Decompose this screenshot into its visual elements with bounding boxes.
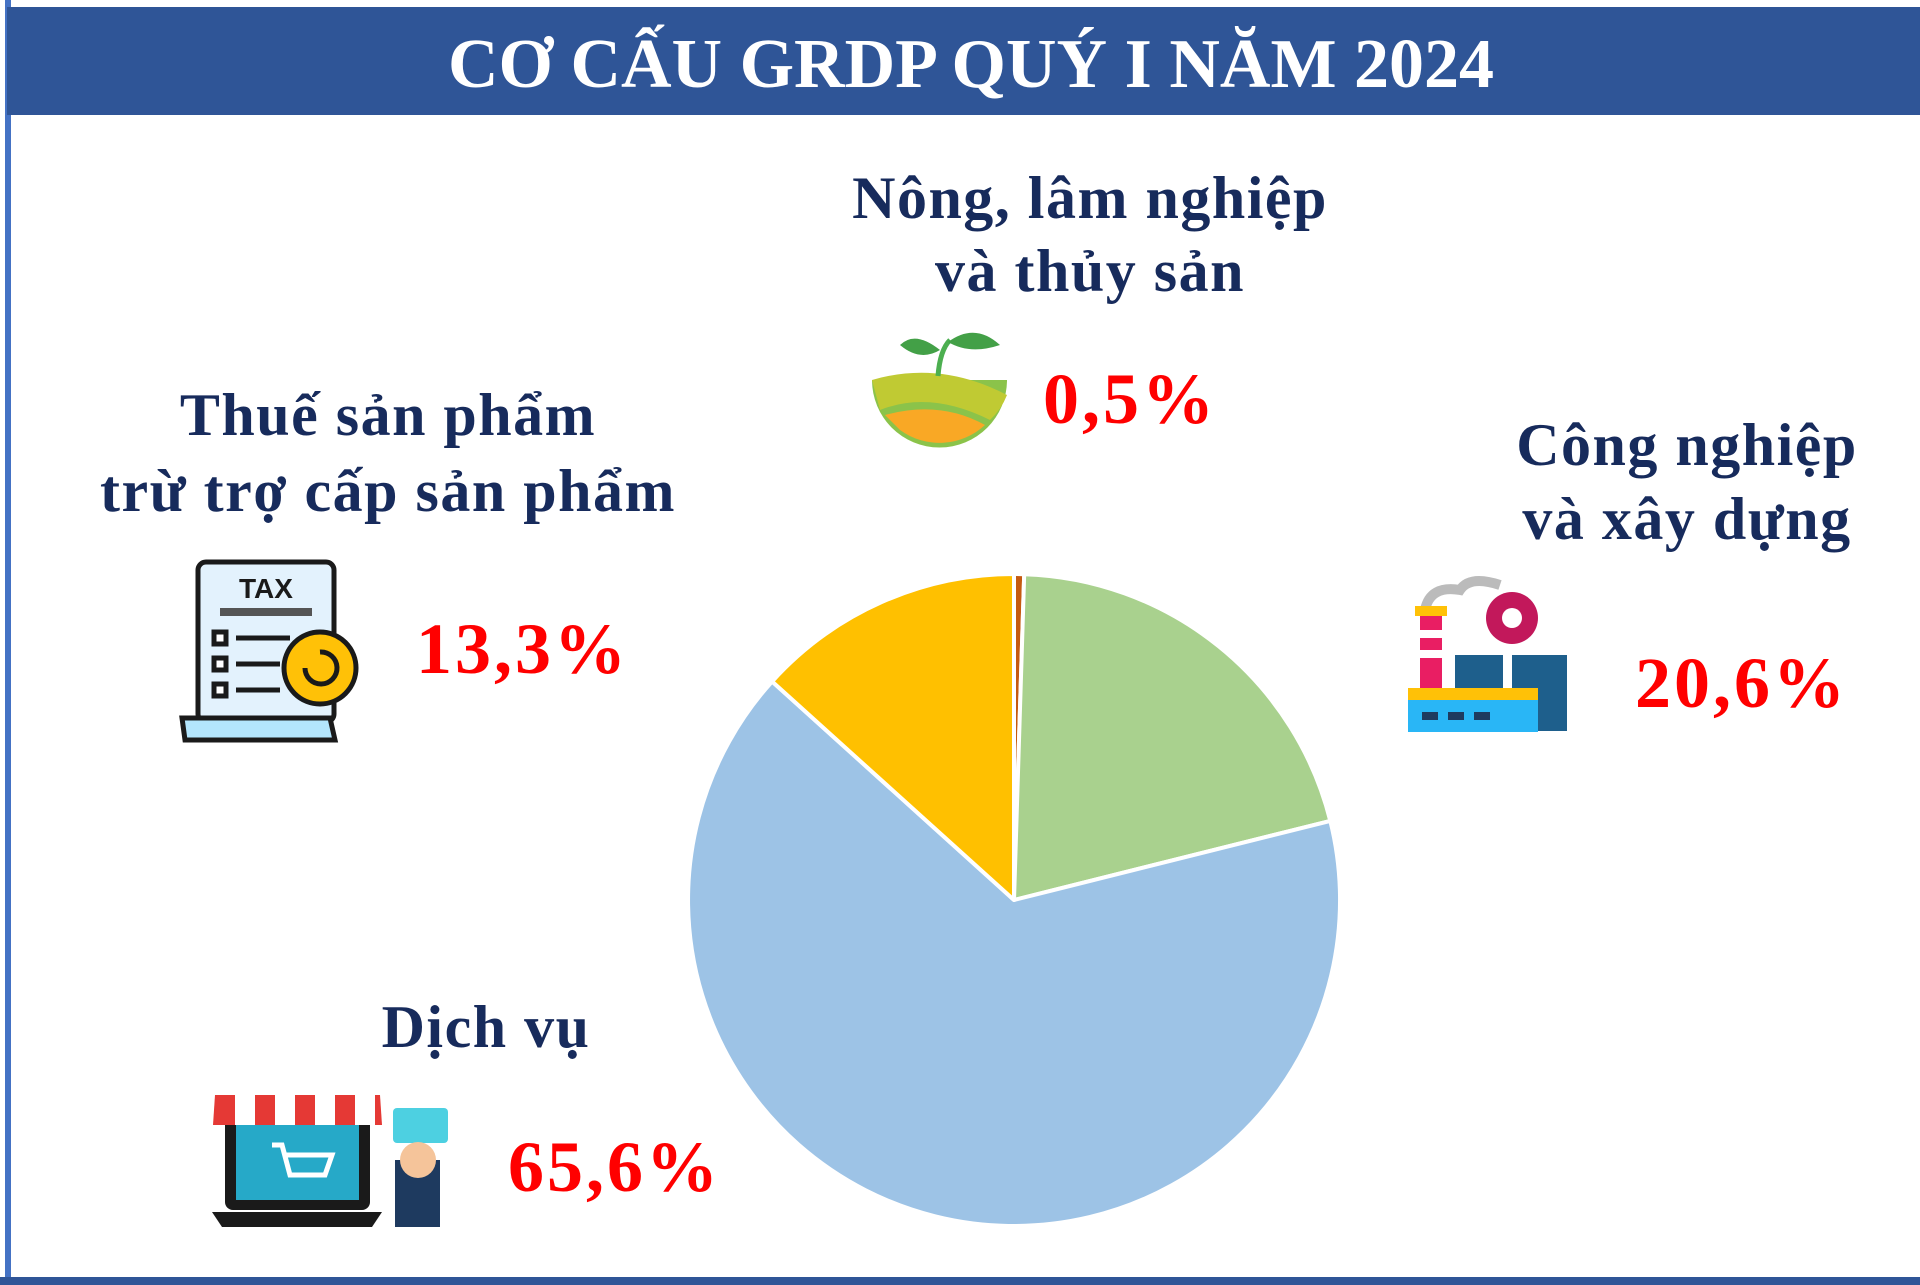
label: agriculture: và thủy sản xyxy=(935,238,1245,304)
icon: shop xyxy=(212,1095,448,1227)
label: agriculture xyxy=(852,165,1328,304)
label: industry: và xây dựng xyxy=(1522,486,1852,552)
title: CƠ CẤU GRDP QUÝ I NĂM 2024 xyxy=(448,24,1494,103)
label: industry xyxy=(1516,412,1858,552)
label: services: Dịch vụ xyxy=(382,994,590,1060)
icon: tax document xyxy=(182,562,356,740)
label: tax: trừ trợ cấp sản phẩm xyxy=(100,458,676,524)
icon: tax document: TAX xyxy=(239,573,293,604)
label: industry: Công nghiệp xyxy=(1516,412,1858,478)
value: 13,3%: 13,3% xyxy=(416,609,629,689)
label: tax xyxy=(100,382,676,524)
icon: factory xyxy=(1408,581,1567,732)
label: agriculture: Nông, lâm nghiệp xyxy=(852,165,1328,231)
value: 0,5%: 0,5% xyxy=(1043,359,1217,439)
value: 65,6%: 65,6% xyxy=(508,1127,721,1207)
icon: plant xyxy=(872,333,1007,447)
title xyxy=(7,7,1920,115)
pie chart xyxy=(688,574,1340,1226)
value: 20,6%: 20,6% xyxy=(1635,643,1848,723)
label: tax: Thuế sản phẩm xyxy=(180,382,596,448)
